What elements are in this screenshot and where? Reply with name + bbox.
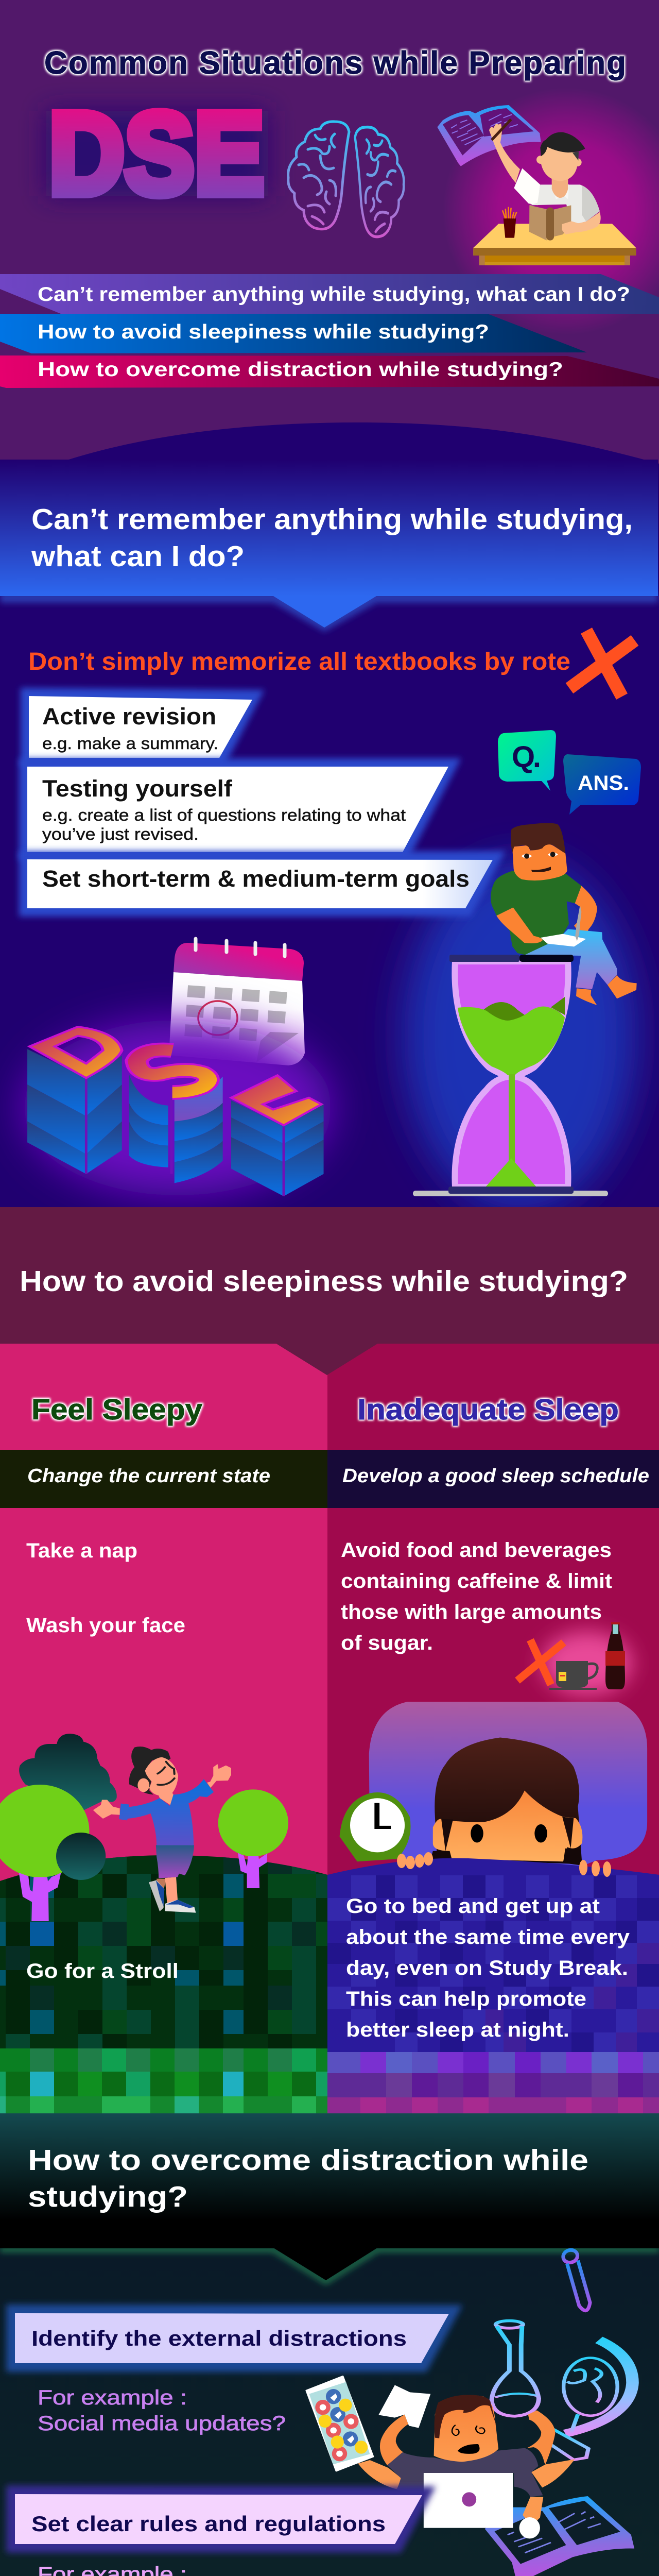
text: avoid food: of sugar. xyxy=(341,1632,433,1654)
illustration: calendar xyxy=(169,939,305,1065)
panel: sleepiness section xyxy=(0,1207,659,2113)
left column xyxy=(0,1344,327,2055)
section heading: studying? xyxy=(28,2180,188,2213)
DSE logotype: DSE xyxy=(49,88,264,218)
tip box: testing yourself: Testing yourself xyxy=(42,775,233,802)
panel: distraction section xyxy=(0,2113,659,2576)
banner: overcome distraction xyxy=(0,355,659,388)
tip box: testing yourself: you’ve just revised. xyxy=(42,825,199,843)
heading: inadequate sleep: Inadequate Sleep xyxy=(357,1393,619,1426)
illustration: hourglass xyxy=(413,955,608,1196)
top section background xyxy=(0,0,659,495)
banner: can't remember xyxy=(0,274,659,314)
text: go for a stroll: Go for a Stroll xyxy=(26,1960,179,1982)
right column xyxy=(327,1344,659,2055)
illustration: 3D DSE letters xyxy=(23,1020,332,1196)
icon: girl's hands xyxy=(397,1852,611,1877)
title: Common Situations while Preparing xyxy=(44,45,626,81)
illustration: boy xyxy=(491,823,637,1005)
band: develop schedule: Develop a good sleep schedule xyxy=(342,1465,649,1487)
text: sleep schedule xyxy=(346,1895,630,2041)
illustration: distracted student xyxy=(358,2385,575,2538)
panel: can't remember section xyxy=(0,422,659,1211)
header banner xyxy=(0,460,658,632)
header banner: Can’t remember anything while studying, xyxy=(31,503,633,536)
tip box: goals xyxy=(26,858,494,910)
mosaic: green ground xyxy=(0,1850,327,2050)
illustration: student at desk xyxy=(437,88,659,335)
mosaic: bright green strip xyxy=(0,2048,327,2113)
icon: ANS speech bubble: ANS. xyxy=(578,772,629,794)
text: take a nap: Take a nap xyxy=(26,1539,137,1562)
tip box: active revision: e.g. make a summary. xyxy=(42,734,218,753)
band: change the current state: Change the current state xyxy=(27,1465,270,1487)
warning text: Don’t simply memorize all textbooks by rote xyxy=(28,648,570,675)
tip box: identify distractions: Identify the external distractions xyxy=(31,2326,407,2350)
tip box: goals: Set short-term & medium-term goals xyxy=(42,866,470,892)
text: avoid food xyxy=(341,1539,612,1654)
icon: flask xyxy=(492,2321,539,2416)
icon: phone with reactions xyxy=(306,2376,373,2471)
banner: avoid sleepiness xyxy=(0,314,587,353)
text: sleep schedule: day, even on Study Break. xyxy=(346,1957,628,1979)
band: develop schedule xyxy=(327,1450,659,1508)
text: social media example xyxy=(38,2386,286,2435)
text: sleep schedule: better sleep at night. xyxy=(346,2019,569,2041)
tip box: set clear rules: Set clear rules and regulations xyxy=(31,2512,386,2536)
illustration: sleeping girl xyxy=(340,1702,647,1867)
tip box: active revision xyxy=(27,694,253,759)
tip box: set clear rules xyxy=(13,2493,424,2546)
text: social media example: For example : xyxy=(38,2386,187,2409)
header banner: what can I do? xyxy=(31,540,245,573)
band: change the current state xyxy=(0,1450,327,1508)
banner: can't remember: Can’t remember anything while studying, what can I do? xyxy=(38,283,630,306)
heading: feel sleepy: Feel Sleepy xyxy=(31,1393,202,1426)
section heading: How to overcome distraction while xyxy=(28,2144,588,2177)
icon: brain xyxy=(288,122,404,237)
tip box: testing yourself xyxy=(26,765,450,854)
icon: test tube xyxy=(562,2248,593,2312)
icon: red cross xyxy=(569,631,635,697)
header pointer xyxy=(275,1343,378,1375)
section heading: How to avoid sleepiness while studying? xyxy=(20,1265,628,1298)
text: avoid food: containing caffeine & limit xyxy=(341,1570,612,1592)
text: sleep schedule: Go to bed and get up at xyxy=(346,1895,600,1918)
text: wash your face: Wash your face xyxy=(26,1614,185,1637)
tip box: active revision: Active revision xyxy=(42,703,216,730)
banner: overcome distraction: How to overcome distraction while studying? xyxy=(38,359,563,381)
section heading xyxy=(28,2144,588,2213)
icon: Q speech bubble: Q. xyxy=(512,740,541,774)
illustration: walking man xyxy=(93,1747,231,1913)
icon: Q speech bubble xyxy=(498,730,556,791)
hourglass glow xyxy=(404,860,636,1211)
text: social media example: Social media updates? xyxy=(38,2412,286,2435)
banner: avoid sleepiness: How to avoid sleepiness while studying? xyxy=(38,321,489,343)
icon: globe xyxy=(543,2340,633,2460)
illustration: trees xyxy=(0,1734,288,1921)
tip box: testing yourself: e.g. create a list of questions relating to what xyxy=(42,806,406,824)
text: avoid food: Avoid food and beverages xyxy=(341,1539,612,1562)
icon: no caffeine drinks xyxy=(517,1622,632,1695)
header background xyxy=(0,2113,659,2281)
mosaic: purple and pink strip xyxy=(327,2052,659,2113)
text: sleep schedule: about the same time every xyxy=(346,1926,630,1948)
text: avoid food: those with large amounts xyxy=(341,1601,602,1623)
tip box: identify distractions xyxy=(13,2312,450,2365)
icon: ANS speech bubble xyxy=(563,754,641,815)
text: sleep schedule: This can help promote xyxy=(346,1988,586,2010)
blanket mosaic xyxy=(327,1855,659,2056)
icon: open book bottom xyxy=(485,2496,634,2576)
